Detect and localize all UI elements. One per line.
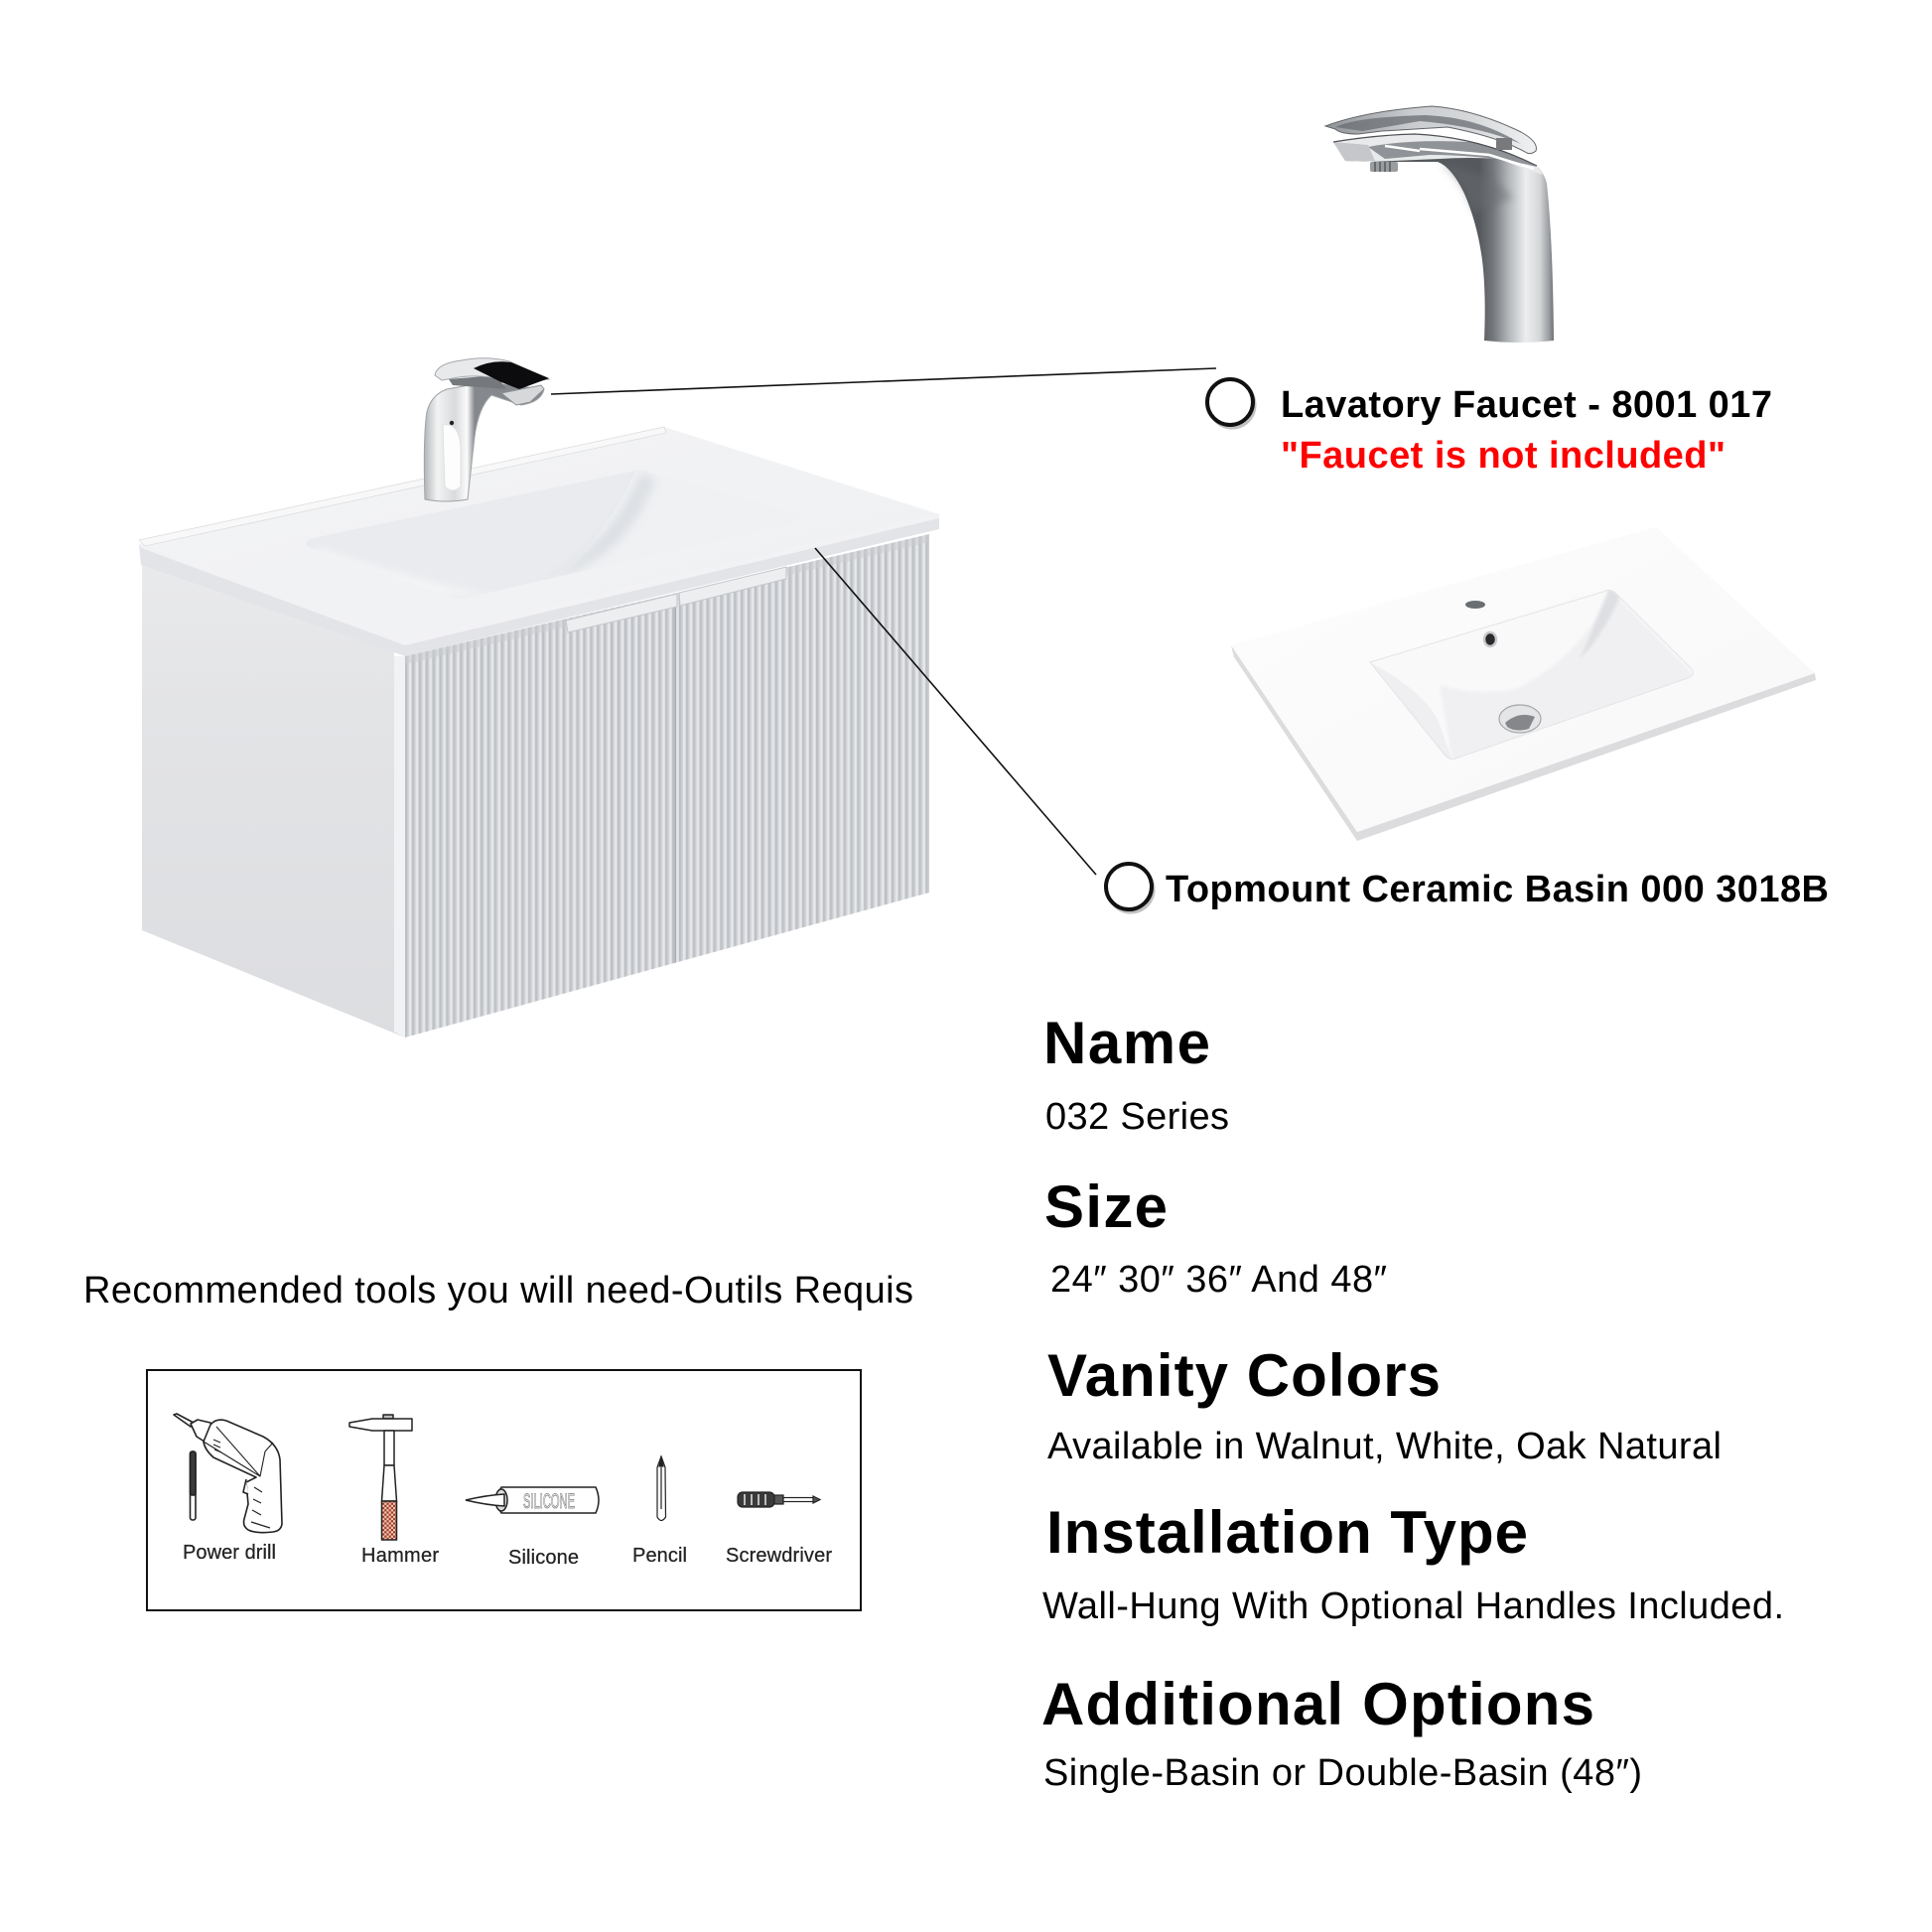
door handle right xyxy=(679,567,786,606)
faucet button xyxy=(450,421,454,425)
spec: size xyxy=(1044,1173,1387,1301)
shoulder shading xyxy=(1440,164,1514,213)
spec: vanity colors: Available in Walnut, White, Oak Natural xyxy=(1047,1426,1722,1467)
faucet aerator xyxy=(1370,162,1398,172)
bowl outline xyxy=(1370,590,1693,759)
faucet handle dark face xyxy=(474,361,549,389)
spec: additional options xyxy=(1041,1671,1642,1794)
marker ring: basin xyxy=(1106,864,1154,912)
icon: screwdriver xyxy=(738,1492,820,1507)
counter back lip xyxy=(139,427,666,546)
spec: additional options: Additional Options xyxy=(1041,1671,1594,1737)
drain xyxy=(1499,705,1541,733)
product photo: ceramic basin xyxy=(1231,590,1816,841)
spec: name: Name xyxy=(1043,1010,1210,1076)
spec: installation type: Installation Type xyxy=(1046,1499,1528,1566)
faucet handle xyxy=(1325,106,1536,154)
tool labels: Hammer xyxy=(361,1545,439,1567)
counter top xyxy=(139,427,939,639)
basin edge xyxy=(1231,645,1816,841)
counter edge xyxy=(139,514,939,656)
icon: pencil xyxy=(657,1456,665,1521)
tools heading: Recommended tools you will need-Outils Requis xyxy=(83,1270,913,1311)
leader line to basin callout xyxy=(815,548,1096,875)
small installed faucet xyxy=(424,358,549,501)
icon: hammer xyxy=(349,1415,412,1540)
counter front highlight xyxy=(139,514,939,645)
spec: name: 032 Series xyxy=(1045,1096,1229,1138)
spec: size: Size xyxy=(1044,1173,1168,1240)
basin top xyxy=(1231,527,1815,832)
overflow xyxy=(1484,632,1496,646)
marker ring: faucet xyxy=(1207,379,1255,428)
spec: vanity colors: Vanity Colors xyxy=(1047,1342,1441,1409)
door handle left xyxy=(566,594,677,632)
spec: size: 24″ 30″ 36″ And 48″ xyxy=(1050,1259,1387,1301)
faucet handle xyxy=(435,358,549,383)
icon: power drill xyxy=(174,1414,282,1533)
spec: installation type xyxy=(1042,1499,1784,1627)
faucet handle dark band xyxy=(1335,115,1521,144)
faucet body inner reflection xyxy=(443,425,461,490)
label: basin model: Topmount Ceramic Basin 000 3018B xyxy=(1166,869,1829,910)
tool labels: Silicone xyxy=(508,1547,579,1569)
spec: vanity colors xyxy=(1047,1342,1722,1467)
spout top detail xyxy=(1333,134,1543,175)
vanity cabinet with basin top xyxy=(139,427,939,1042)
tool labels xyxy=(183,1542,832,1569)
cabinet side panel xyxy=(142,561,405,1037)
icon: silicone tube: SILICONE xyxy=(523,1490,575,1513)
tool labels: Power drill xyxy=(183,1542,276,1564)
sink bowl xyxy=(306,471,655,588)
tool labels: Screwdriver xyxy=(726,1545,832,1567)
spec: additional options: Single-Basin or Double-Basin (48″) xyxy=(1043,1752,1642,1794)
faucet body xyxy=(424,382,544,501)
faucet spout xyxy=(501,385,544,405)
icon: silicone tube xyxy=(466,1487,599,1513)
faucet mechanism xyxy=(449,375,506,389)
faucet neck xyxy=(1333,134,1554,343)
spec: installation type: Wall-Hung With Optional Handles Included. xyxy=(1042,1586,1784,1627)
label: faucet not included: "Faucet is not included" xyxy=(1281,435,1725,477)
product photo: chrome faucet xyxy=(1325,106,1554,343)
cabinet front edge strip xyxy=(394,656,405,1037)
label: faucet model: Lavatory Faucet - 8001 017 xyxy=(1281,384,1772,426)
basin bowl xyxy=(1372,591,1691,759)
leader line to faucet callout xyxy=(551,368,1216,394)
tap hole xyxy=(1465,601,1485,609)
fluted door fronts xyxy=(405,526,929,1042)
faucet handle clip xyxy=(1496,138,1512,150)
tools panel xyxy=(147,1370,861,1610)
tools frame xyxy=(147,1370,861,1610)
tool labels: Pencil xyxy=(632,1545,687,1567)
spec: name xyxy=(1043,1010,1229,1138)
